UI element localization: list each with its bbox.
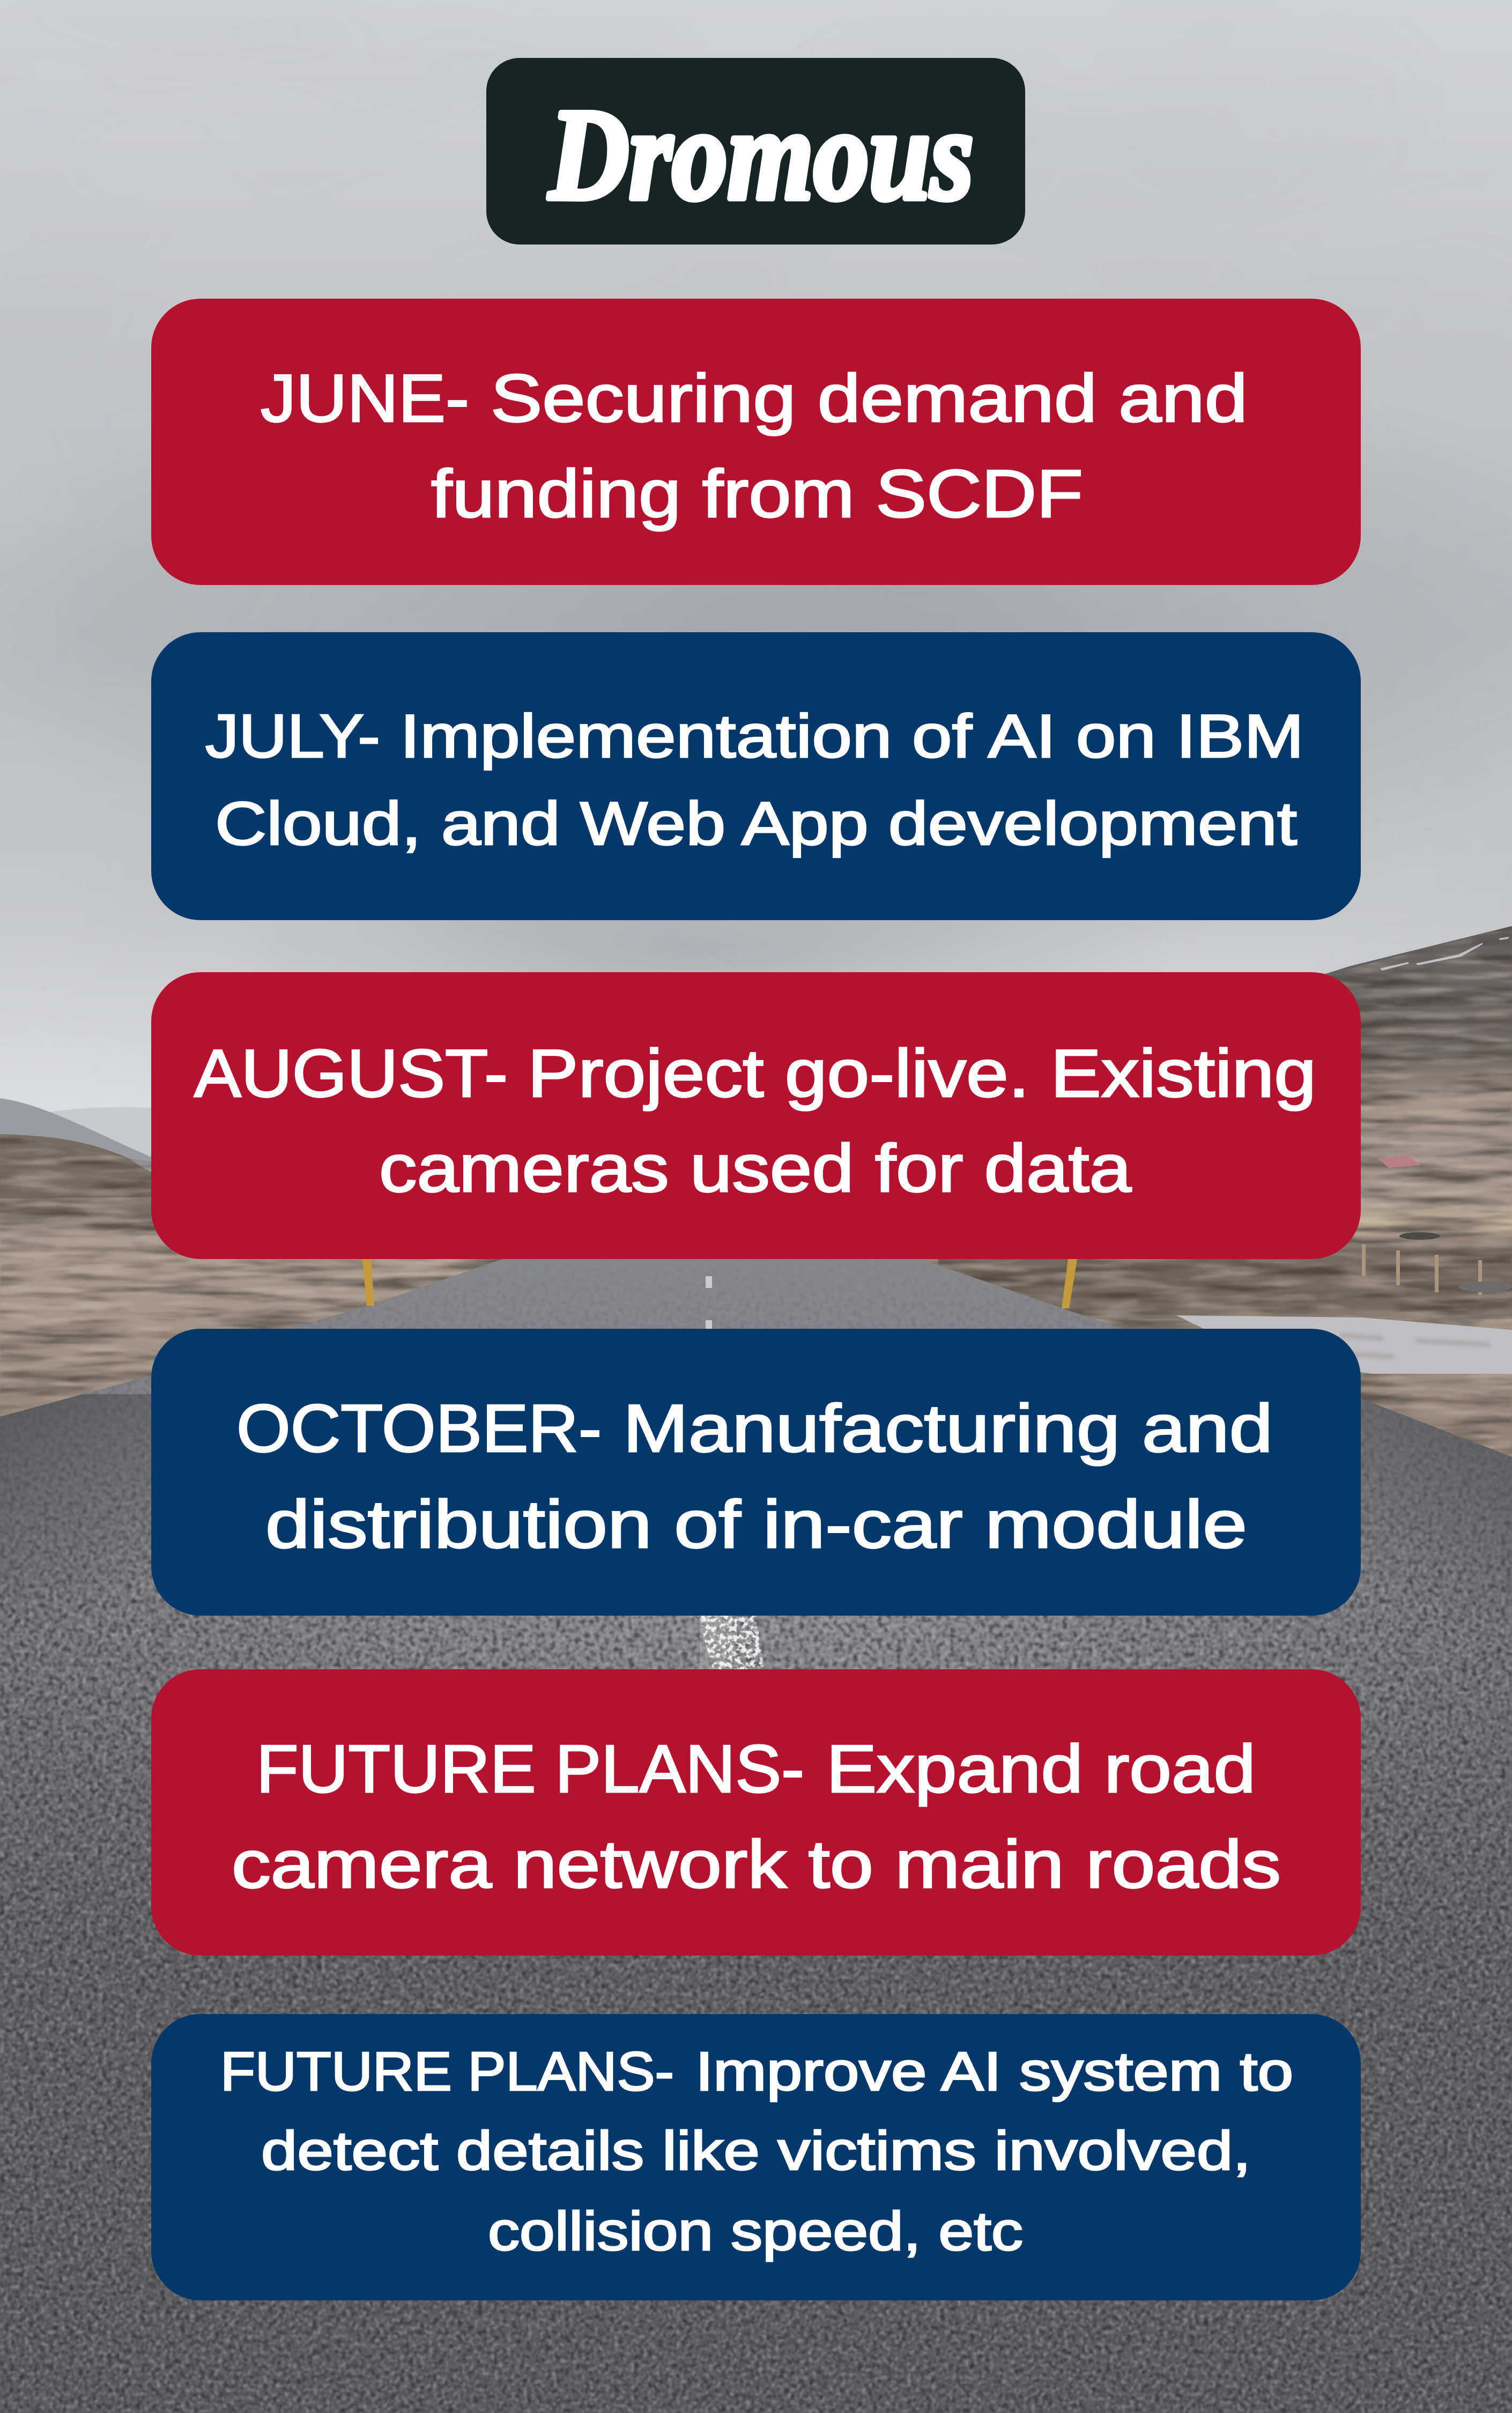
- text: October milestone: [236, 1390, 1273, 1562]
- text: camera network plan: FUTURE PLANS-: [256, 1731, 804, 1807]
- text: July milestone: Cloud, and Web App development: [215, 790, 1297, 858]
- text: August milestone: Project go-live. Existing: [528, 1035, 1316, 1111]
- land texture: [0, 926, 1512, 1456]
- panel: future plans, road cameras: [151, 1669, 1361, 1956]
- text: AI improvement plan: FUTURE PLANS-: [220, 2041, 674, 2102]
- text: AI improvement plan: collision speed, etc: [488, 2201, 1023, 2262]
- panel: July: [151, 632, 1361, 920]
- text: June milestone: [261, 360, 1248, 531]
- tan valley land: [0, 1105, 1512, 1480]
- text: August milestone: AUGUST-: [194, 1035, 508, 1111]
- text: July milestone: [205, 702, 1304, 858]
- yellow road marker posts: [362, 1259, 1077, 1308]
- snow patches on right mountain: [1380, 937, 1509, 971]
- text: AI improvement plan: [220, 2041, 1293, 2262]
- red-roofed farmhouse: [1378, 1156, 1421, 1168]
- text: June milestone: funding from SCDF: [431, 456, 1083, 531]
- text: August milestone: cameras used for data: [379, 1130, 1132, 1206]
- sky: [0, 0, 1512, 1153]
- title badge: [486, 58, 1025, 245]
- text: AI improvement plan: Improve AI system to: [695, 2041, 1293, 2102]
- text: July milestone: JULY-: [205, 702, 380, 771]
- panel: June: [151, 299, 1361, 585]
- distant grey mountain, left: [0, 1098, 300, 1212]
- text: June milestone: Securing demand and: [491, 360, 1248, 436]
- text: camera network plan: Expand road: [826, 1731, 1256, 1807]
- brown hill, left: [0, 1134, 300, 1228]
- panel: October: [151, 1329, 1361, 1616]
- title text: Dromous: Dromous: [548, 82, 974, 227]
- farm fence and rocks: [1362, 1232, 1512, 1295]
- road surface: [0, 1255, 1512, 2413]
- hazy far ridge, left: [43, 1107, 182, 1180]
- right mountain slope: [1153, 926, 1512, 1169]
- text: August milestone: [194, 1035, 1316, 1206]
- text: camera network plan: [232, 1731, 1281, 1902]
- panel: August: [151, 972, 1361, 1259]
- text: July milestone: Implementation of AI on IBM: [400, 702, 1304, 771]
- text: October milestone: distribution of in-car module: [265, 1486, 1247, 1562]
- text: October milestone: OCTOBER-: [236, 1390, 602, 1466]
- text: June milestone: JUNE-: [261, 360, 469, 436]
- panel: future plans, AI system: [151, 2014, 1361, 2300]
- text: October milestone: Manufacturing and: [623, 1390, 1273, 1466]
- lane markings: [697, 1276, 764, 1669]
- meltwater pond: [1176, 1315, 1512, 1374]
- land shading bands: [0, 1188, 1512, 1319]
- text: camera network plan: camera network to main roads: [232, 1826, 1281, 1902]
- text: AI improvement plan: detect details like victims involved,: [261, 2120, 1251, 2181]
